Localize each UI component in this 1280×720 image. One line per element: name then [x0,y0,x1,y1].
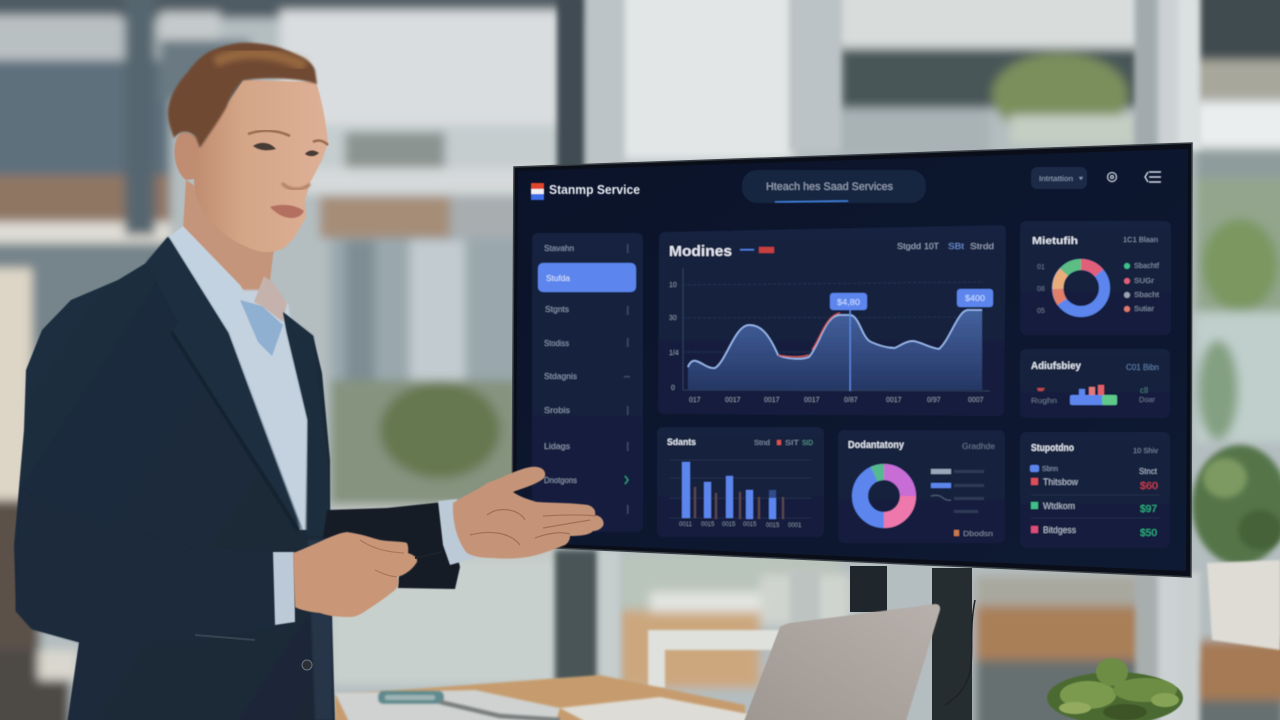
shirt [228,290,308,530]
panel: metric donut: 05 [1037,308,1045,315]
chart legend: Strdd [970,242,994,251]
callout [957,289,993,307]
panel: sidebar: Stodiss [544,339,569,348]
panel: sidebar: Stavahn [544,244,574,253]
panel: activity mini bars [1020,349,1170,418]
pocket detail [195,635,255,640]
dropdown: Intrtattion [1039,176,1073,183]
panel: bar chart: 0011 [679,522,693,528]
legend: Dbodsn [963,531,993,538]
legend [931,469,993,538]
panel: bar chart: SIT [785,440,800,447]
window pillars [555,0,1200,720]
logo [531,183,544,200]
laptop [743,604,940,720]
panel: summary table: Wtdkom [1043,501,1075,511]
panel: summary table: $60 [1140,481,1158,492]
sleeve, outstretched arm [323,502,460,589]
donut chart [860,472,908,520]
panel: sidebar [532,233,643,532]
suit jacket [14,237,335,720]
y axis labels: 0 [671,385,675,392]
panel: bar chart: SID [802,440,813,447]
panel: sidebar: Stdagnis [544,372,577,381]
chart legend: Stgdd [897,242,921,251]
brand title: Stanmp Service [549,182,640,197]
dashboard screen [512,143,1192,577]
jacket button [302,660,312,670]
panel: activity mini bars: cIl [1140,386,1148,395]
panel: donut distribution: Dodantatony [848,440,904,451]
line series [688,310,982,368]
neck [183,180,274,296]
screen surface [516,149,1188,571]
knuckle lines [360,540,404,577]
collar [169,226,287,356]
panel: activity mini bars: Rughn [1031,398,1057,405]
donut chart [1058,264,1104,312]
hair [168,43,317,148]
legend [1124,263,1159,313]
panel: line chart [658,225,1006,416]
search pill [742,170,926,203]
dropdown [1031,167,1087,189]
icon: menu [1145,172,1161,182]
panel: summary table: Thitsbow [1043,477,1078,487]
icon: settings [1108,172,1116,182]
panel: summary table: $50 [1140,528,1157,539]
pen [415,552,442,558]
jacket lapel shading [146,237,333,720]
legend: Sbacht [1134,292,1159,299]
y axis labels: 30 [669,315,677,322]
y axis labels: 1/4 [669,350,679,357]
panel: summary table [1020,432,1170,548]
panel: bar chart: 0001 [788,523,802,529]
panel: metric donut: 01 [1037,264,1045,271]
callout [830,293,867,310]
panel: metric donut [1020,221,1171,335]
cuff [273,552,295,625]
foreground plant [1047,658,1183,720]
x axis labels: 0017 [804,397,820,404]
mouth [270,205,304,218]
x axis labels: 0007 [968,397,984,404]
chart legend [740,242,994,253]
hair highlight [215,53,305,66]
panel: summary table: Stupotdno [1031,443,1074,454]
y axis labels: 10 [669,282,677,289]
panel: bar chart: 0015 [743,522,757,528]
cable [945,600,975,705]
x axis labels: 017 [689,397,701,404]
ear [174,133,200,180]
brows [248,131,328,145]
panel: sidebar: Srobis [544,406,570,415]
panel: metric donut: Mietufih [1032,236,1078,247]
x axis labels: 0/87 [844,397,858,404]
panel: sidebar: Lidags [544,442,570,451]
papers and glasses on desk [335,690,748,720]
panel: activity mini bars: C01 Bibn [1126,363,1159,372]
panel: bar chart: Sdants [667,437,696,447]
palm lines [470,510,596,545]
chart legend: 10T [924,242,939,251]
panel: summary table: Sbnn [1042,466,1058,473]
panel: bar chart: 0015 [722,522,736,528]
screen bezel [512,143,1192,577]
legend: SUGr [1134,278,1155,285]
panel: metric donut: 1C1 Blaan [1123,237,1158,244]
panel: bar chart: 0015 [701,522,715,528]
panel: bar chart: 0015 [766,523,780,529]
panel: sidebar: Stufda [546,274,571,283]
panel: summary table: $97 [1140,504,1157,515]
x axis labels [689,397,984,404]
panel: donut distribution: Gradhde [962,442,996,451]
search pill: Hteach hes Saad Services [766,181,893,193]
panel: summary table: 10 Shiv [1133,448,1159,455]
panel: metric donut: 08 [1037,286,1045,293]
legend: Sutiar [1134,306,1155,313]
x axis labels: 0/97 [927,397,941,404]
presenter [14,43,604,720]
panel: sidebar: Dnotgons [544,476,577,485]
marker line [850,310,851,391]
nose shadow [282,183,310,189]
panel: summary table: Bitdgess [1043,525,1076,535]
x axis labels: 0017 [764,397,780,404]
chart heading: Modines [669,243,732,260]
red highlight series [778,313,840,357]
hand: open palm [453,467,604,559]
potted plant and planter, right [1192,445,1280,650]
legend: Sbachtf [1134,263,1159,270]
face [194,80,328,252]
y axis labels [669,282,679,392]
cuff [438,499,475,565]
grid [683,282,984,352]
mini bar chart [1070,385,1117,405]
hand: holding pen [293,532,417,617]
callout: $400 [965,294,986,303]
desk [335,675,745,720]
panel: donut distribution [838,430,1005,543]
panel: bar chart [657,427,824,537]
callout: $4,80 [837,298,861,307]
area series [688,310,982,390]
panel: bar chart: Stnd [754,440,770,447]
x axis labels: 0017 [725,397,741,404]
window frame in wood room [648,630,782,688]
eyes [253,143,319,156]
x axis labels: 0017 [886,397,902,404]
chart legend: SBt [948,242,965,251]
panel: activity mini bars: Adiufsbiey [1031,361,1081,372]
forearm sleeve, holding arm [16,490,278,642]
panel: sidebar: Stgnts [545,305,569,314]
panel: activity mini bars: Doar [1139,397,1156,404]
monitor stand [850,566,972,720]
panel: summary table: Stnct [1139,467,1158,476]
